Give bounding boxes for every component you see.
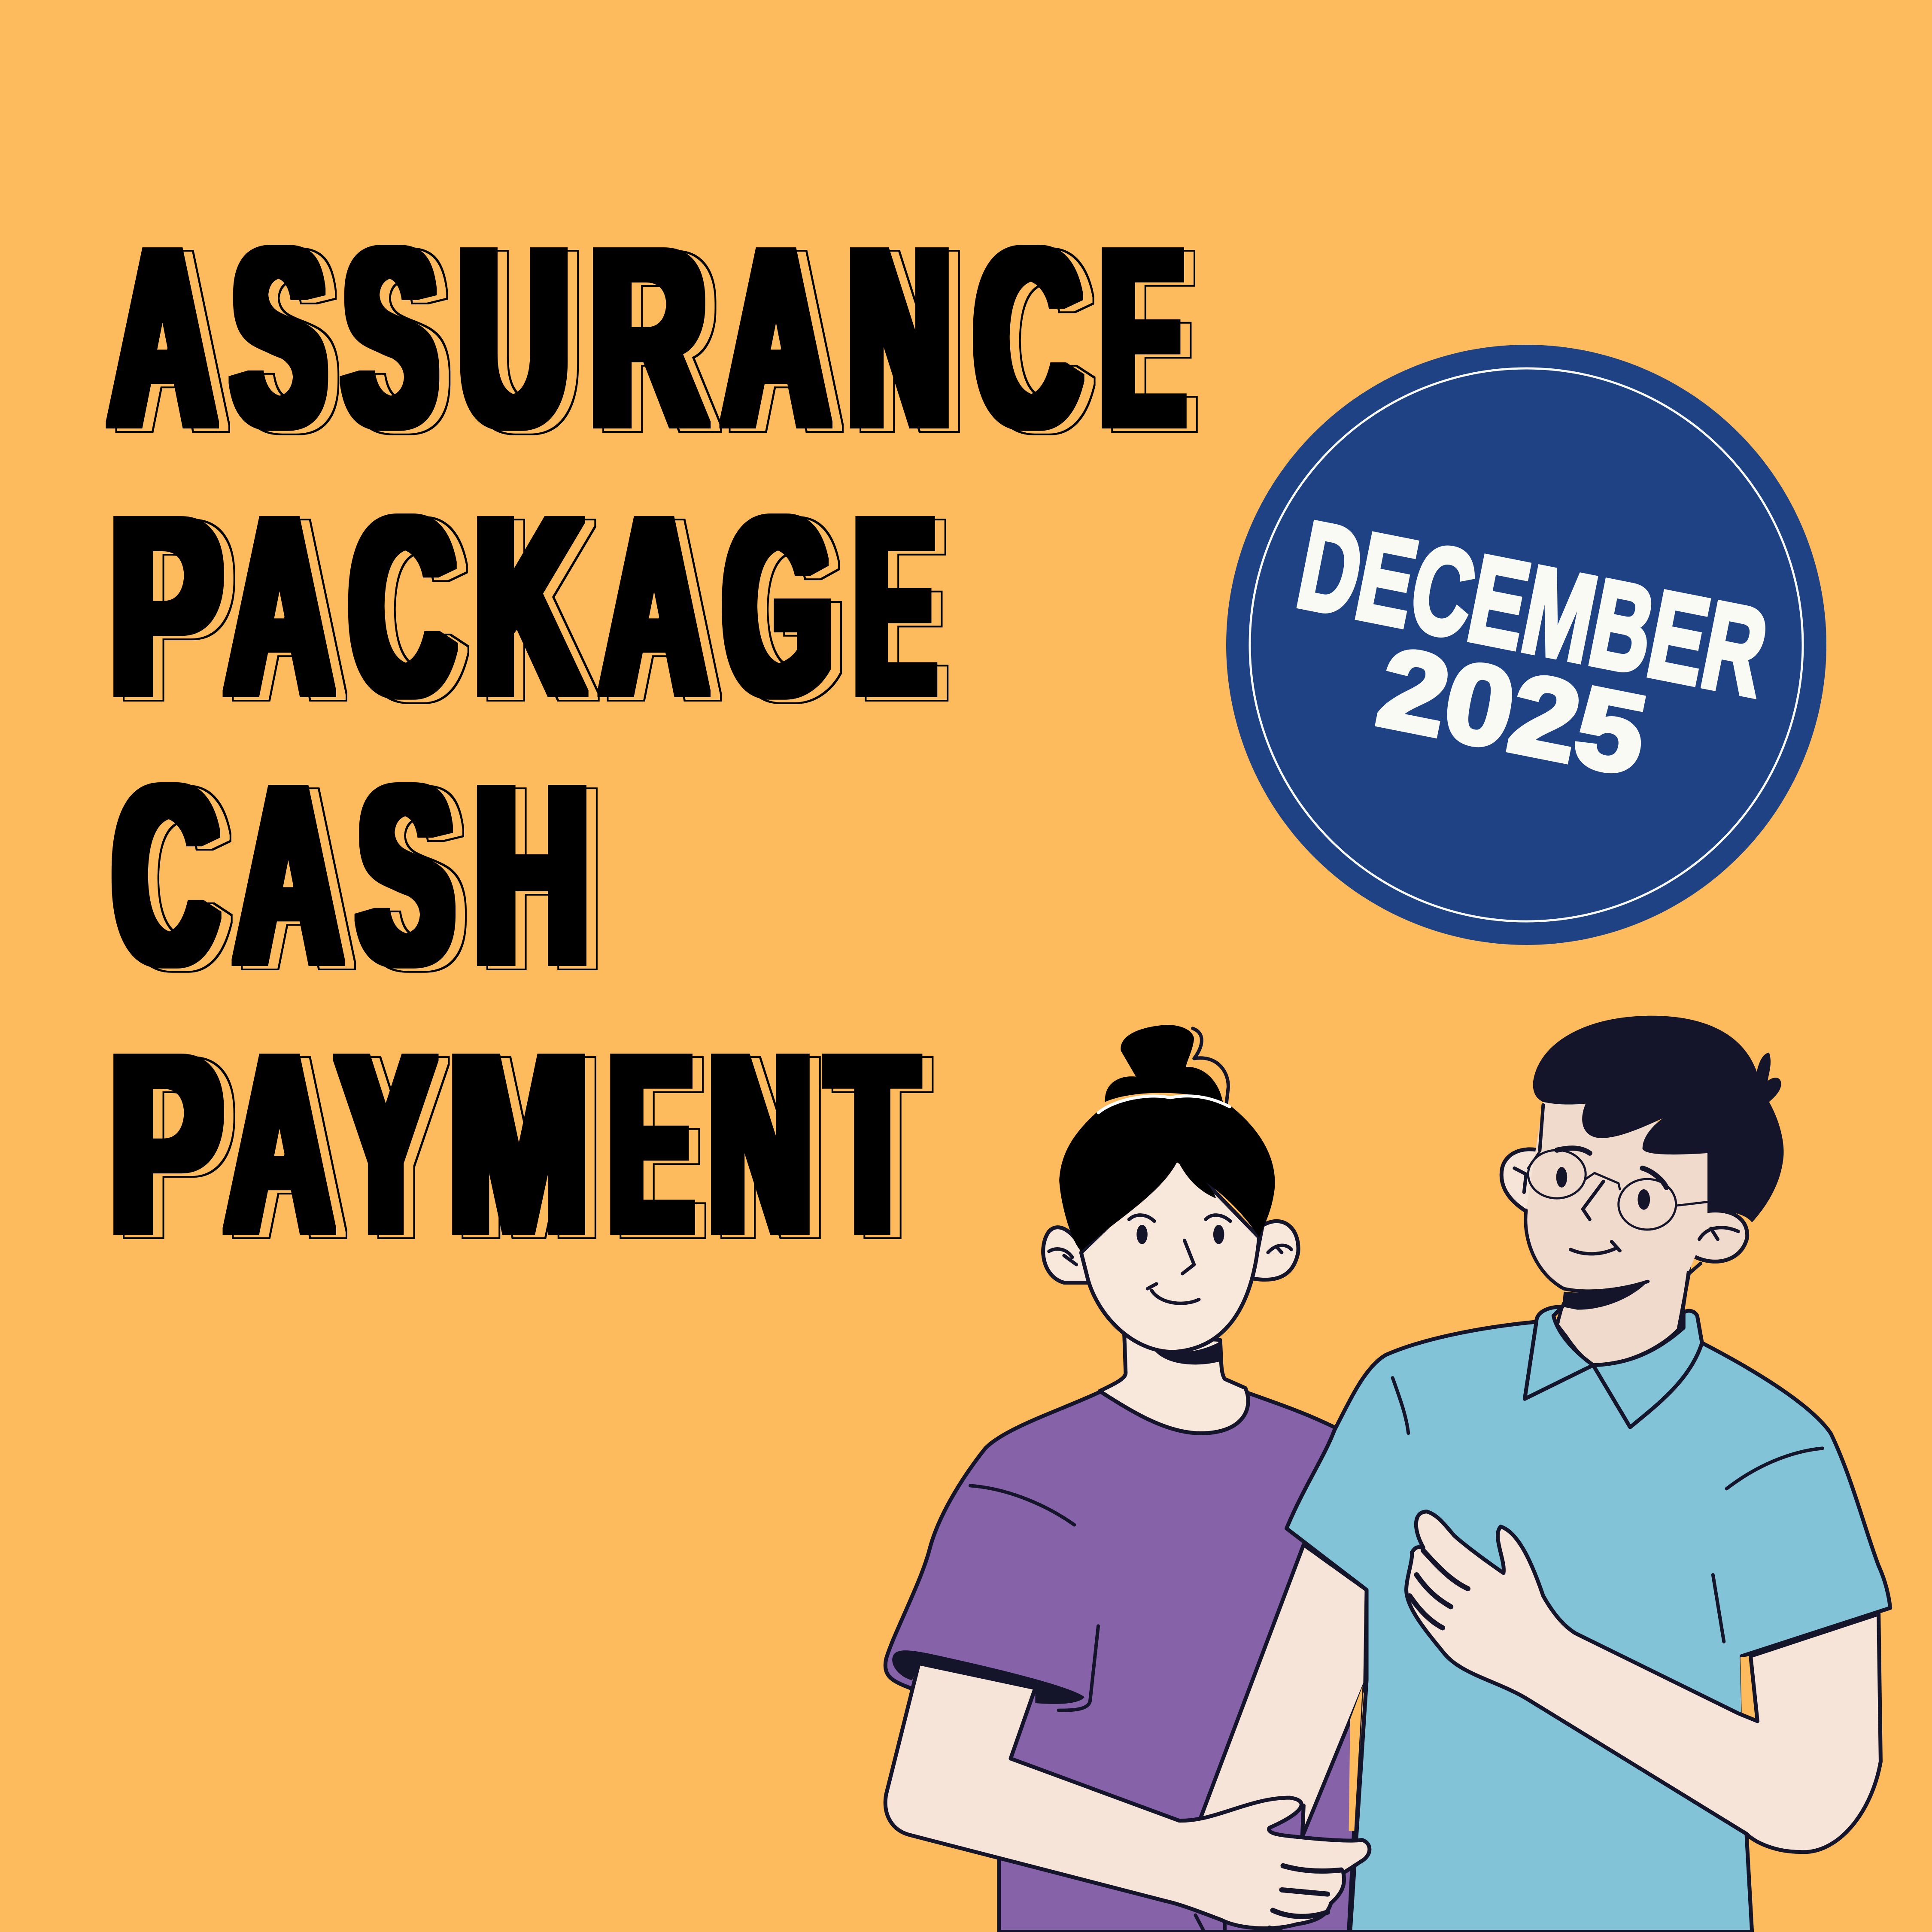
title line: PAYMENT: M [449, 1002, 589, 1285]
man finger lines [1410, 1551, 1468, 1628]
woman sleeve shadow [892, 1650, 1084, 1704]
title line: ASSURANCE: C [975, 196, 1081, 479]
title line: PAYMENT: Y [338, 1002, 433, 1285]
title line: ASSURANCE: U [459, 196, 569, 479]
fringe lock [1177, 1159, 1216, 1198]
woman arm [885, 1663, 1370, 1928]
title line: PACKAGE: P [110, 465, 222, 748]
woman arm and hand [885, 1663, 1370, 1932]
man neck [1557, 1267, 1689, 1365]
man face [1525, 1096, 1707, 1291]
woman [885, 1025, 1362, 1932]
illustration: couple [885, 1016, 1890, 1932]
title line: CASH: A [236, 734, 341, 1017]
neck shadow [1153, 1342, 1221, 1364]
title: E [855, 465, 934, 748]
man hair [1533, 1016, 1784, 1222]
man [1200, 1016, 1890, 1932]
title line: PACKAGE: C [350, 465, 454, 748]
title line: ASSURANCE: A [110, 196, 215, 479]
badge ring [1250, 368, 1803, 921]
title line: CASH: H [474, 734, 589, 1017]
title line: ASSURANCE: S [343, 196, 437, 479]
title line: CASH: C [113, 734, 218, 1017]
man right ear [1692, 1211, 1747, 1261]
orange gap behind arm [1349, 1686, 1362, 1831]
hair band [1098, 1096, 1230, 1113]
title line: PAYMENT: E [610, 1002, 692, 1285]
title line: PAYMENT: T [828, 1002, 916, 1285]
title line: PACKAGE: A [601, 465, 707, 748]
face outline [1525, 1105, 1701, 1328]
orange gap by right arm [1741, 1656, 1757, 1719]
badge disc [1226, 345, 1826, 945]
title line: ASSURANCE: S [232, 196, 326, 479]
neck shadow [1562, 1282, 1648, 1310]
title line: ASSURANCE: R [590, 196, 706, 479]
woman shirt creases [970, 1485, 1098, 1710]
title line: ASSURANCE: A [723, 196, 829, 479]
woman finger lines [1273, 1866, 1341, 1917]
man glasses [1528, 1150, 1707, 1230]
man facial features [1514, 1148, 1738, 1254]
title line: CASH: S [358, 734, 453, 1017]
man shirt creases [1393, 1378, 1823, 1642]
man arm and hand [1406, 1512, 1880, 1852]
man left ear [1501, 1149, 1543, 1213]
text: E [1101, 196, 1184, 479]
woman facial features [1049, 1215, 1291, 1303]
title line: ASSURANCE: N [848, 196, 951, 479]
woman shirt [885, 1391, 1362, 1932]
neck inside collar [1560, 1270, 1687, 1364]
collar right [1593, 1311, 1702, 1427]
woman neck [1100, 1334, 1248, 1433]
hand lower edge [1195, 1915, 1285, 1932]
woman left ear [1043, 1227, 1095, 1283]
woman bun [1105, 1025, 1223, 1102]
woman face [1081, 1156, 1259, 1352]
woman hair [1059, 1097, 1275, 1252]
title line: PAYMENT: N [709, 1002, 811, 1285]
date badge [1226, 345, 1826, 945]
title line: PACKAGE: A [227, 465, 332, 748]
collar left [1525, 1307, 1593, 1399]
bun outline [1193, 1028, 1228, 1105]
title line: PAYMENT: A [227, 1002, 332, 1285]
woman right ear [1252, 1221, 1298, 1280]
man shirt [1286, 1322, 1890, 1932]
title line: PACKAGE: K [475, 465, 582, 748]
title line: PACKAGE: G [724, 465, 832, 748]
man far arm [1200, 1545, 1367, 1837]
badge text: 2025: 2025 [1369, 624, 1656, 799]
title [110, 196, 1184, 1285]
title line: PAYMENT: P [110, 1002, 222, 1285]
